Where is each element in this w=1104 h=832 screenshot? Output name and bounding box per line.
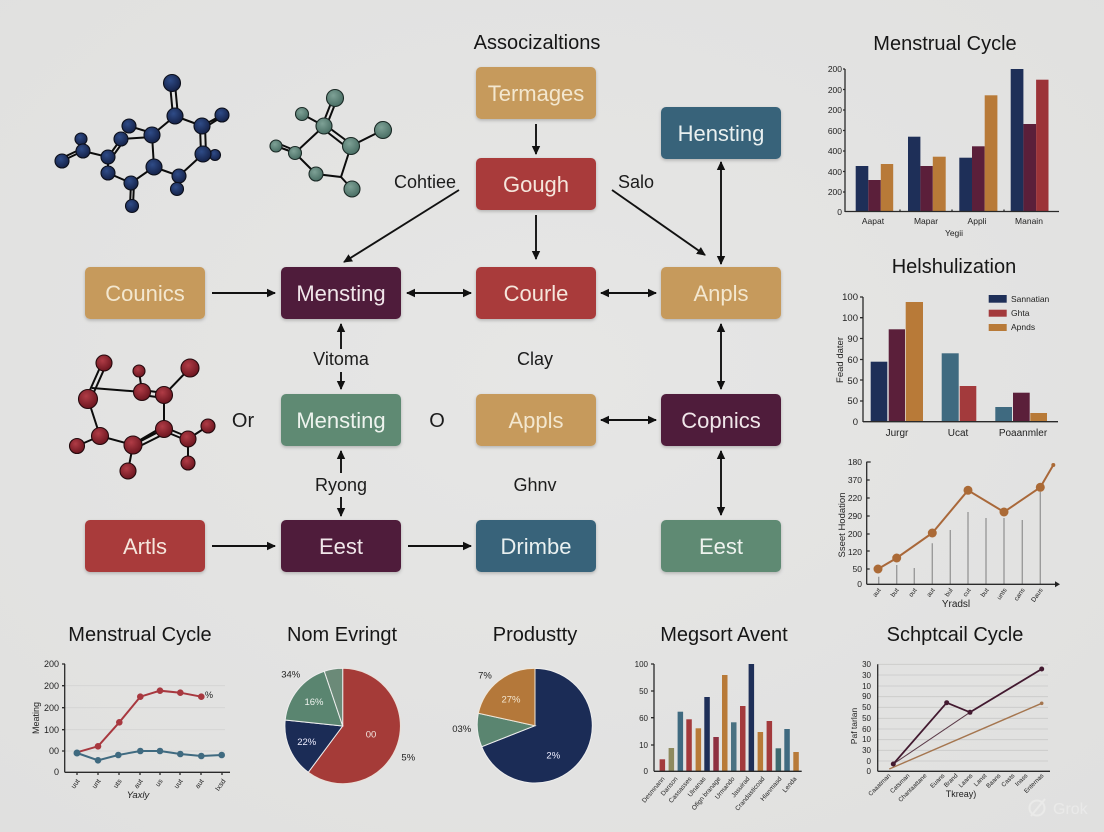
box: Mensting plum xyxy=(281,267,401,319)
chart: Menstrual Cycle lines: aut xyxy=(194,778,206,790)
chart: Schptcail Cycle lines: Euans xyxy=(929,772,946,790)
chart: Menstrual Cycle grouped bars: 200 xyxy=(828,64,842,74)
chart: line with drop stems: Yradsl xyxy=(942,599,970,610)
chart: Menstrual Cycle lines: uut xyxy=(70,778,82,790)
chart: Megsort Avent bars: Desmnann xyxy=(641,775,667,804)
watermark: Grok xyxy=(1030,799,1089,818)
chart: Menstrual Cycle grouped bars: Aapat xyxy=(862,216,885,226)
chart: Produstty pie: 03% xyxy=(452,724,472,735)
chart: Menstrual Cycle lines: Ixsd xyxy=(215,778,228,793)
chart: Megsort Avent bars: 60 xyxy=(639,714,649,723)
box: Counics: Counics xyxy=(105,281,185,306)
chart: Schptcail Cycle lines xyxy=(849,624,1050,804)
chart: Produstty pie: 2% xyxy=(546,750,561,762)
chart: Helshulization bars with legend: 100 xyxy=(842,292,858,303)
chart: Menstrual Cycle grouped bars: 200 xyxy=(828,85,842,95)
chart: Helshulization bars with legend: 100 xyxy=(842,313,858,324)
box: Counics xyxy=(85,267,205,319)
chart: Schptcail Cycle lines: Chantaattane xyxy=(897,772,929,804)
chart: Schptcail Cycle lines: Baans xyxy=(985,772,1002,790)
box: Copnics xyxy=(661,394,781,446)
box: Termages xyxy=(476,67,596,119)
chart: Schptcail Cycle lines: Tkreay) xyxy=(946,789,976,799)
chart: Schptcail Cycle lines: Lanst xyxy=(973,772,989,788)
chart: Helshulization bars with legend: 60 xyxy=(847,355,858,366)
chart: line with drop stems: aut xyxy=(872,587,883,599)
flow arrows xyxy=(212,124,721,546)
box: Mensting plum: Mensting xyxy=(296,281,386,306)
box: Eest green xyxy=(661,520,781,572)
chart: Helshulization bars with legend: 90 xyxy=(847,334,858,345)
chart: Helshulization bars with legend: Jurgr xyxy=(886,428,909,439)
box: Anpls top xyxy=(661,267,781,319)
chart: Nom Evringt pie: 00 xyxy=(366,730,376,740)
chart: Menstrual Cycle lines: Yaxly xyxy=(127,790,151,801)
box: Artls: Artls xyxy=(123,534,167,559)
chart: line with drop stems: aut xyxy=(926,587,937,599)
chart: line with drop stems: 220 xyxy=(848,493,862,503)
chart: Menstrual Cycle grouped bars: 200 xyxy=(828,105,842,115)
chart: Menstrual Cycle lines: unt xyxy=(91,778,103,790)
chart: Schptcail Cycle lines: 10 xyxy=(862,735,872,744)
chart: Helshulization bars with legend xyxy=(835,256,1058,439)
chart: Megsort Avent bars: Jasuirad xyxy=(730,775,752,799)
chart: Nom Evringt pie: 22% xyxy=(297,737,317,748)
box: Drimbe: Drimbe xyxy=(501,534,571,559)
chart: line with drop stems: 0 xyxy=(857,579,862,589)
box: Termages: Termages xyxy=(488,81,584,106)
chart: Schptcail Cycle lines: 60 xyxy=(862,725,872,734)
chart: Menstrual Cycle grouped bars: 200 xyxy=(828,187,842,197)
chart: line with drop stems: bul xyxy=(944,587,955,598)
chart: Schptcail Cycle lines: 30 xyxy=(862,746,872,755)
chart: Schptcail Cycle lines: Paf tarlan xyxy=(849,708,859,744)
chart: Menstrual Cycle lines: 200 xyxy=(44,681,59,691)
chart: line with drop stems: out xyxy=(908,587,919,599)
connector labels: Salo xyxy=(618,172,654,192)
chart: Nom Evringt pie: 16% xyxy=(304,697,324,708)
chart: Menstrual Cycle lines: 00 xyxy=(49,746,59,756)
chart: Menstrual Cycle grouped bars: 400 xyxy=(828,146,842,156)
box: Gough xyxy=(476,158,596,210)
chart: Menstrual Cycle lines: 0 xyxy=(54,767,59,777)
connector labels: Ghnv xyxy=(513,475,557,495)
chart: Menstrual Cycle lines: uut xyxy=(173,778,185,790)
chart: Nom Evringt pie: 5% xyxy=(401,752,416,764)
chart: Schptcail Cycle lines: 0 xyxy=(867,767,872,776)
chart: Schptcail Cycle lines: 50 xyxy=(862,714,872,723)
connector labels: Ryong xyxy=(315,475,367,495)
box: Courle: Courle xyxy=(504,281,568,306)
box: Drimbe xyxy=(476,520,596,572)
box: Copnics: Copnics xyxy=(681,408,761,433)
chart: Menstrual Cycle lines: Meating xyxy=(31,702,41,734)
chart: Helshulization bars with legend: 50 xyxy=(847,376,858,387)
chart: Schptcail Cycle lines: Brand xyxy=(943,772,960,789)
chart: Nom Evringt pie: 34% xyxy=(281,670,301,680)
chart: Megsort Avent bars: Lenda xyxy=(782,775,799,794)
chart: Schptcail Cycle lines: 50 xyxy=(862,703,872,712)
chart: Menstrual Cycle grouped bars: 0 xyxy=(837,207,842,217)
chart: Menstrual Cycle grouped bars: Menstrual Cycle xyxy=(873,33,1017,55)
chart: Schptcail Cycle lines: Caaatman xyxy=(867,772,893,798)
chart: Menstrual Cycle grouped bars: 400 xyxy=(828,167,842,177)
chart: Helshulization bars with legend: 0 xyxy=(853,417,858,428)
watermark: Grok: Grok xyxy=(1053,801,1089,818)
chart: Menstrual Cycle lines: uts xyxy=(113,778,124,790)
chart: Schptcail Cycle lines: Inass xyxy=(1014,772,1029,788)
chart: line with drop stems xyxy=(837,457,1060,610)
chart: line with drop stems: but xyxy=(980,587,991,599)
chart: line with drop stems: Sseet Hodation xyxy=(837,493,848,557)
chart: Menstrual Cycle lines: us xyxy=(155,778,165,788)
chart: Megsort Avent bars: 0 xyxy=(644,767,649,776)
chart: Menstrual Cycle lines: 200 xyxy=(44,659,59,669)
chart: line with drop stems: Daus xyxy=(1030,587,1045,604)
connector labels: Cohtiee xyxy=(394,172,456,192)
connector labels: Vitoma xyxy=(313,349,370,369)
chart: line with drop stems: 370 xyxy=(848,475,862,485)
connector labels: Clay xyxy=(517,349,553,369)
chart: Menstrual Cycle grouped bars: Yegii xyxy=(945,228,963,238)
chart: line with drop stems: 290 xyxy=(848,511,862,521)
box: Mensting green xyxy=(281,394,401,446)
chart: Schptcail Cycle lines: 10 xyxy=(862,682,872,691)
chart: Schptcail Cycle lines: Casts xyxy=(1000,772,1016,789)
chart: Produstty pie: 27% xyxy=(501,694,521,706)
box: Eest plum: Eest xyxy=(319,534,363,559)
chart: Helshulization bars with legend: Helshulization xyxy=(892,256,1016,278)
chart: Menstrual Cycle lines: 100 xyxy=(44,725,59,735)
chart: Megsort Avent bars xyxy=(635,624,802,812)
chart: Menstrual Cycle grouped bars: Mapar xyxy=(914,216,938,226)
chart: Schptcail Cycle lines: Laans xyxy=(958,772,974,789)
chart: Megsort Avent bars: Danson xyxy=(660,775,680,797)
chart: Megsort Avent bars: Ulnanas xyxy=(687,775,708,799)
box: Hensting xyxy=(661,107,781,159)
flow diagram boxes xyxy=(85,67,781,572)
chart: Menstrual Cycle lines: 200 xyxy=(44,703,59,713)
chart: line with drop stems: but xyxy=(890,587,901,599)
chart: Schptcail Cycle lines: Catsman xyxy=(889,772,912,795)
chart: Schptcail Cycle lines: 90 xyxy=(862,692,872,701)
box: Anpls top: Anpls xyxy=(693,281,749,306)
connector labels: O xyxy=(429,410,445,432)
chart: Produstty pie: 7% xyxy=(478,670,492,682)
chart: Menstrual Cycle grouped bars: Appli xyxy=(968,216,987,226)
chart: Schptcail Cycle lines: Schptcail Cycle xyxy=(887,624,1023,646)
chart: Helshulization bars with legend: Ucat xyxy=(948,428,969,439)
chart: line with drop stems: 180 xyxy=(848,457,862,467)
molecule: navy xyxy=(55,74,229,212)
chart: Megsort Avent bars: Ofign branage xyxy=(691,775,723,812)
chart: line with drop stems: 50 xyxy=(853,564,862,574)
chart: Produstty pie: Produstty xyxy=(493,624,577,646)
chart: Megsort Avent bars: 100 xyxy=(635,660,649,669)
chart: line with drop stems: cans xyxy=(1013,587,1027,602)
chart: Megsort Avent bars: Hlanmasd xyxy=(759,775,784,803)
chart: Menstrual Cycle grouped bars: 600 xyxy=(828,126,842,136)
box: Appls xyxy=(476,394,596,446)
connector labels: Or xyxy=(232,410,254,432)
chart: Schptcail Cycle lines: 0 xyxy=(867,757,872,766)
chart: Produstty pie xyxy=(452,624,592,783)
box: Hensting: Hensting xyxy=(678,121,764,146)
legend: Sannatian xyxy=(1011,294,1050,304)
box: Eest green: Eest xyxy=(699,534,743,559)
chart: Schptcail Cycle lines: Enternas xyxy=(1023,772,1045,795)
chart: Schptcail Cycle lines: 30 xyxy=(862,671,872,680)
connector labels xyxy=(232,172,654,495)
chart: Nom Evringt pie: Nom Evringt xyxy=(287,624,397,646)
chart: Menstrual Cycle lines xyxy=(31,624,230,801)
molecule: green xyxy=(270,90,392,197)
chart: Menstrual Cycle grouped bars xyxy=(828,33,1059,238)
box: Appls: Appls xyxy=(508,408,564,433)
chart: line with drop stems: cut xyxy=(962,587,973,598)
box: Eest plum xyxy=(281,520,401,572)
chart: Helshulization bars with legend: Poaanmler xyxy=(999,428,1048,439)
box: Mensting green: Mensting xyxy=(296,408,386,433)
chart: Helshulization bars with legend: 50 xyxy=(847,396,858,407)
chart: Helshulization bars with legend: Fead dater xyxy=(835,337,846,383)
chart: Megsort Avent bars: Urmando xyxy=(714,775,737,801)
molecule: red xyxy=(70,355,215,479)
chart: Menstrual Cycle grouped bars: Manain xyxy=(1015,216,1043,226)
chart: Megsort Avent bars: Crandasticoad xyxy=(734,775,767,812)
chart: Nom Evringt pie xyxy=(281,624,416,784)
box: Courle xyxy=(476,267,596,319)
legend: Apnds xyxy=(1011,322,1035,332)
box: Artls xyxy=(85,520,205,572)
chart: line with drop stems: 200 xyxy=(848,529,862,539)
chart: line with drop stems: 120 xyxy=(848,547,862,557)
chart: Megsort Avent bars: Cassasses xyxy=(668,775,694,805)
chart: Megsort Avent bars: Megsort Avent xyxy=(660,624,788,646)
chart: Megsort Avent bars: 10 xyxy=(639,741,649,750)
chart: line with drop stems: unts xyxy=(996,587,1009,601)
legend xyxy=(989,294,1050,332)
chart: Menstrual Cycle lines: % xyxy=(205,690,213,700)
chart: Menstrual Cycle lines: aut xyxy=(133,778,145,790)
main title: Associzaltions xyxy=(474,32,600,54)
legend: Ghta xyxy=(1011,308,1030,318)
box: Gough: Gough xyxy=(503,172,569,197)
chart: Megsort Avent bars: 50 xyxy=(639,687,649,696)
chart: Schptcail Cycle lines: 30 xyxy=(862,660,872,669)
chart: Menstrual Cycle lines: Menstrual Cycle xyxy=(68,624,212,646)
